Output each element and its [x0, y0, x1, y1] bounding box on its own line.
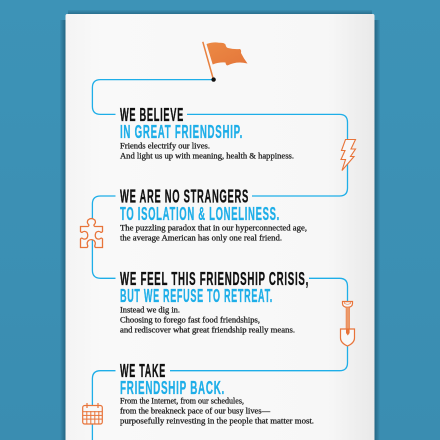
icon: puzzle piece [80, 219, 102, 248]
icon: flag [203, 42, 248, 82]
section 4: take friendship back [120, 360, 314, 426]
heading line 2: IN GREAT FRIENDSHIP. [120, 121, 243, 142]
icon: shovel [340, 302, 354, 346]
heading line 1: WE BELIEVE [120, 104, 184, 125]
body text: Instead we dig in. [120, 306, 180, 314]
section 4: take friendship back: WE TAKE [120, 360, 166, 381]
paper sheet [66, 14, 374, 440]
body text: Friends electrify our lives. [120, 142, 210, 150]
section 3: friendship crisis: BUT WE REFUSE TO RETREAT. [120, 285, 273, 306]
body text [120, 142, 294, 160]
heading line 2: FRIENDSHIP BACK. [120, 377, 225, 398]
section 2: no strangers [120, 186, 307, 242]
connector line [92, 80, 348, 440]
body text: purposefully reinvesting in the people that matter most. [120, 416, 314, 426]
body text: Choosing to forego fast food friendships, [120, 316, 260, 324]
body text [120, 396, 314, 426]
section 1: we believe [120, 104, 294, 160]
body text [120, 224, 307, 242]
heading line 2: TO ISOLATION & LONELINESS. [120, 203, 280, 224]
body text: And light us up with meaning, health & happiness. [120, 152, 294, 160]
body text [120, 306, 295, 334]
heading line 1: WE ARE NO STRANGERS [120, 186, 249, 206]
section 3: friendship crisis [120, 268, 309, 334]
icon: lightning bolt [341, 140, 356, 170]
body text: From the Internet, from our schedules, [120, 396, 244, 406]
body text: from the breakneck pace of our busy lives— [120, 406, 271, 416]
body text: and rediscover what great friendship really means. [120, 326, 295, 334]
body text: the average American has only one real friend. [120, 234, 282, 242]
body text: The puzzling paradox that in our hyperconnected age, [120, 224, 307, 232]
icon: calendar [83, 403, 102, 424]
paper shadow [60, 10, 380, 440]
